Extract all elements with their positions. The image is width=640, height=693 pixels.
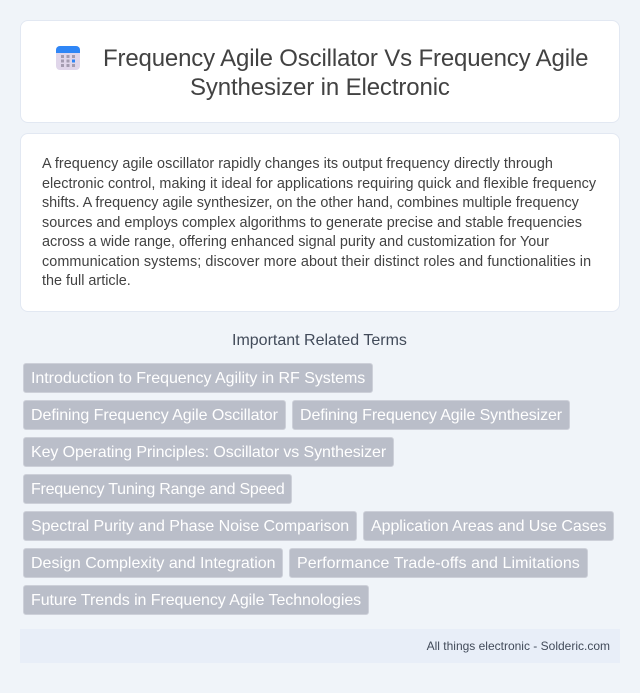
tags: related terms: [23, 363, 614, 615]
tag: [23, 511, 357, 541]
tag: Spectral Purity and Phase Noise Comparison: [31, 518, 349, 535]
text block: description: the full article.: [42, 273, 131, 289]
tag: [23, 400, 286, 430]
tag: [23, 437, 394, 467]
tag: [363, 511, 614, 541]
text block: description: shifts. A frequency agile synthesizer, on the other hand, combines multiple frequency: [42, 195, 579, 211]
text block: description: across a wide range, offering enhanced signal purity and customization for Your: [42, 234, 549, 250]
title line 2: Synthesizer in Electronic: [190, 74, 450, 101]
tag: Frequency Tuning Range and Speed: [31, 481, 285, 498]
tag: Defining Frequency Agile Oscillator: [31, 407, 278, 424]
tag: [23, 363, 373, 393]
text block: description: communication systems; discover more about their distinct roles and functionalities in: [42, 254, 591, 270]
footer text: All things electronic - Solderic.com: [427, 639, 610, 653]
panel: title card: [20, 20, 620, 123]
text block: description: [42, 156, 596, 289]
tag: [292, 400, 570, 430]
tag: [23, 474, 292, 504]
footer: [20, 629, 620, 663]
tag: Defining Frequency Agile Synthesizer: [300, 407, 562, 424]
tag: Key Operating Principles: Oscillator vs Synthesizer: [31, 444, 386, 461]
tag: Design Complexity and Integration: [31, 555, 276, 572]
tag: [289, 548, 588, 578]
title: Frequency Agile Oscillator Vs Frequency Agile: [103, 45, 588, 72]
text block: description: sources and employs complex algorithms to generate precise and stable frequencies: [42, 214, 582, 230]
tag: Introduction to Frequency Agility in RF Systems: [31, 370, 365, 387]
text block: description: A frequency agile oscillator rapidly changes its output frequency directly through: [42, 156, 553, 172]
panel: description: [20, 133, 620, 312]
tag: [23, 548, 283, 578]
icon: calendar: [56, 46, 80, 70]
heading: related terms: Important Related Terms: [232, 332, 407, 349]
tag: Application Areas and Use Cases: [371, 518, 606, 535]
tag: Performance Trade-offs and Limitations: [297, 555, 580, 572]
text block: description: electronic control, making it ideal for applications requiring quick and flexible frequency: [42, 176, 596, 192]
tag: Future Trends in Frequency Agile Technologies: [31, 592, 361, 609]
tag: [23, 585, 369, 615]
